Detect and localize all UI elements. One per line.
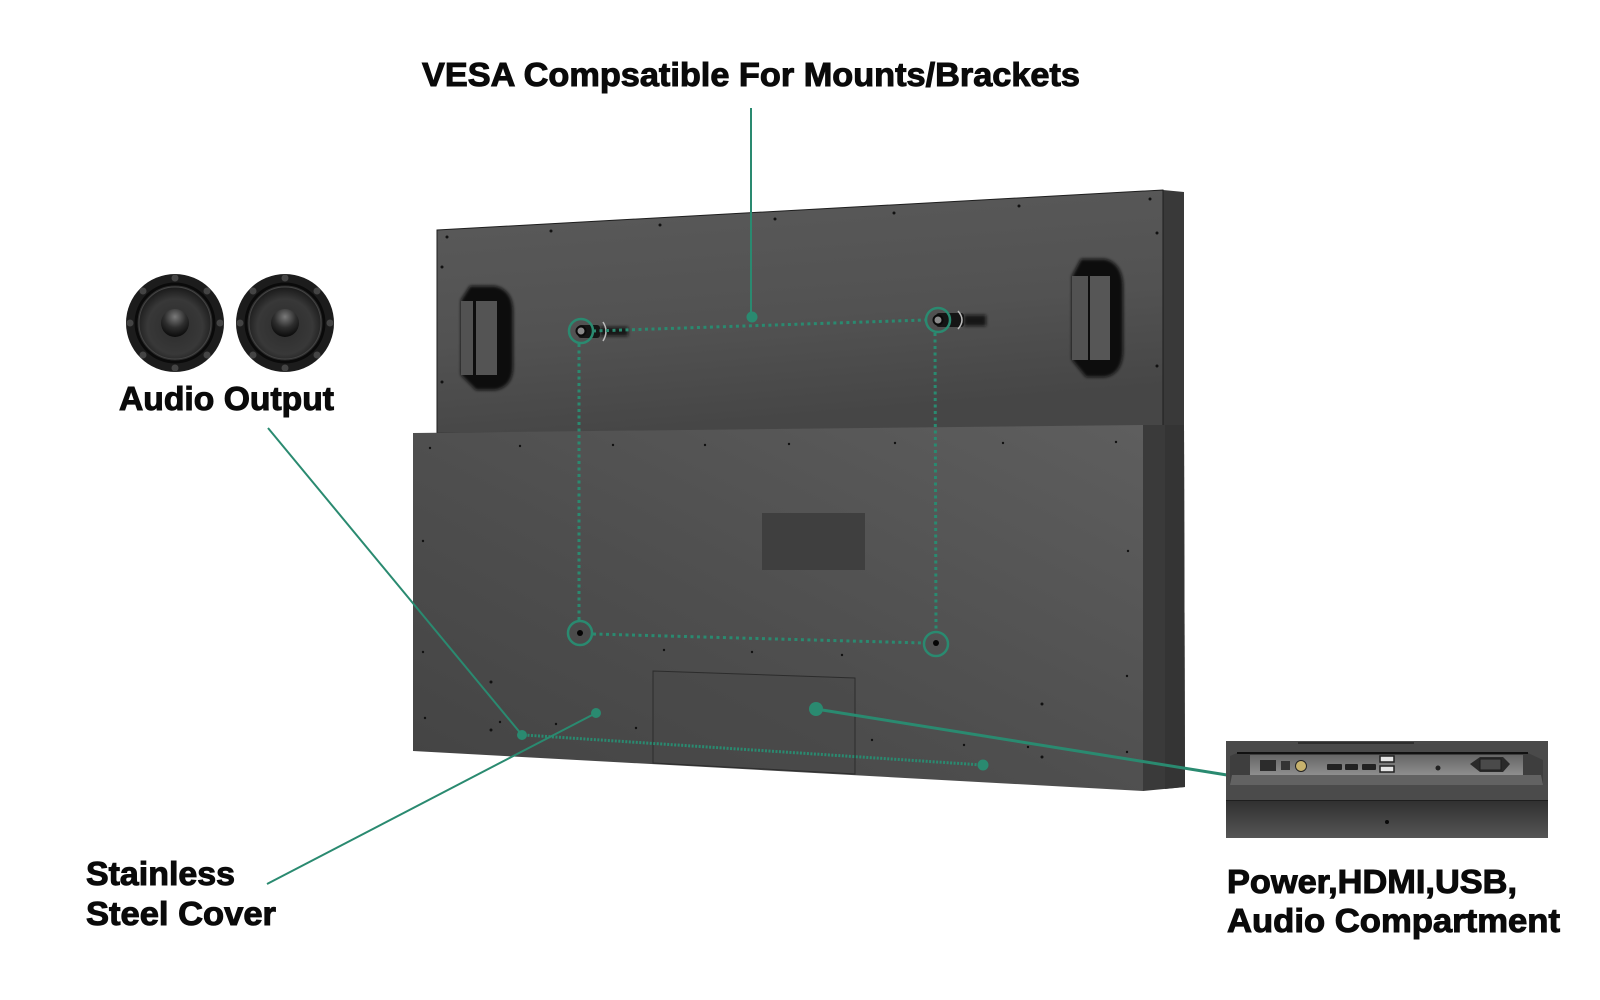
optical port (1281, 761, 1290, 770)
display rear (413, 190, 1185, 791)
right handle (1072, 259, 1123, 377)
left mounting bolt (576, 322, 628, 341)
left handle (461, 286, 513, 390)
screw (1436, 766, 1440, 770)
stainless steel label: Steel Cover (86, 895, 276, 932)
VESA corner rings (568, 308, 950, 656)
lower mounting holes (577, 630, 939, 646)
USB ports (1380, 756, 1394, 772)
icon: speakers (126, 274, 334, 372)
port compartment photo (1226, 741, 1548, 838)
title: VESA Compsatible For Mounts/Brackets (422, 56, 1080, 93)
stainless steel label: Stainless (86, 855, 235, 892)
leader: VESA (746, 108, 758, 322)
leader: audio (268, 428, 988, 770)
ports label: Audio Compartment (1227, 902, 1560, 939)
leader: stainless steel cover (267, 708, 601, 884)
panel: lower side inner shade (1165, 425, 1185, 789)
compartment cover (653, 671, 855, 774)
right mounting bolt (934, 311, 986, 329)
power inlet (1470, 757, 1510, 772)
HDMI ports (1327, 764, 1376, 770)
vent plate (762, 513, 865, 570)
leader: ports (809, 702, 1227, 775)
audio label: Audio Output (119, 380, 334, 417)
panel: lower rear side edge (1143, 425, 1185, 791)
screw holes (422, 198, 1158, 758)
RJ45 port (1260, 760, 1276, 771)
panel: lower rear face (413, 425, 1143, 791)
coax port (1296, 760, 1306, 772)
VESA dotted rectangle (579, 320, 936, 643)
panel: upper rear face (437, 190, 1163, 433)
panel: upper rear side edge (1163, 190, 1184, 430)
ports label: Power,HDMI,USB, (1227, 863, 1517, 900)
